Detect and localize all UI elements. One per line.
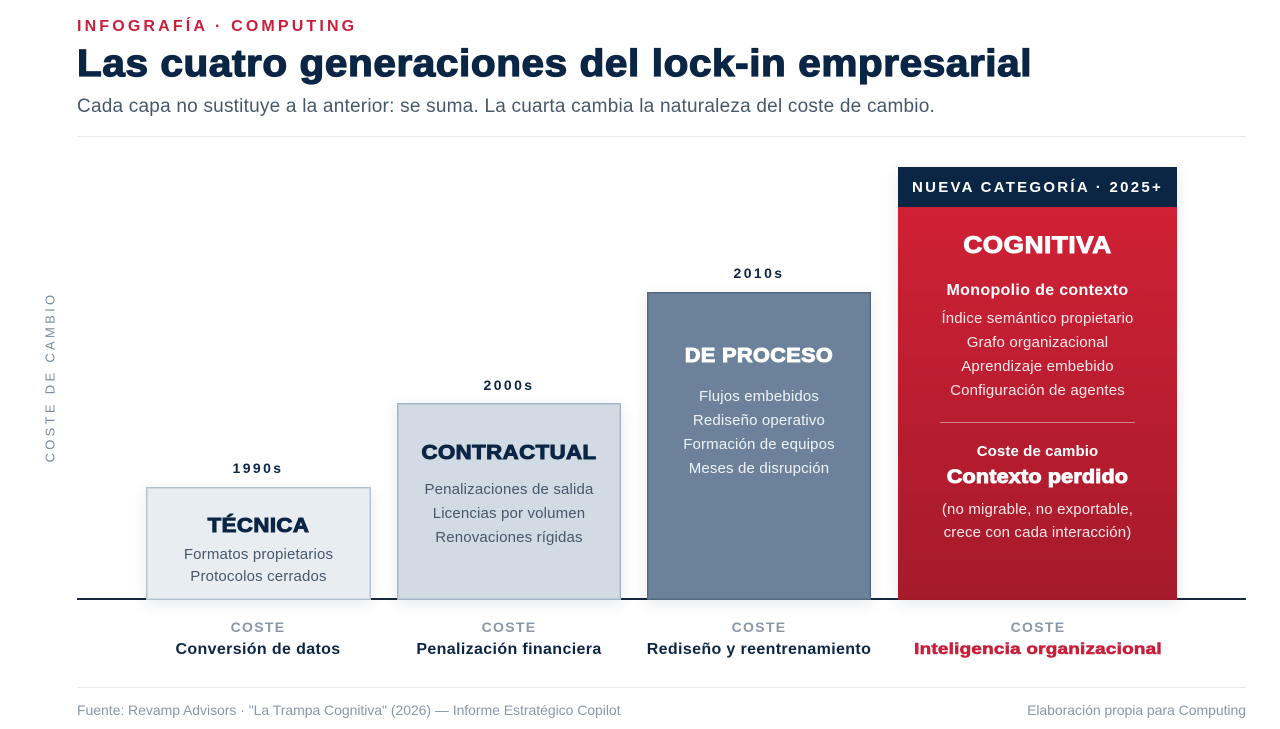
bar items: Renovaciones rígidas bbox=[435, 529, 583, 546]
bar title: TÉCNICA bbox=[208, 515, 309, 537]
bar title: DE PROCESO bbox=[685, 345, 833, 367]
bar items bbox=[425, 481, 594, 546]
bar title: CONTRACTUAL bbox=[421, 442, 597, 464]
badge: NUEVA CATEGORÍA · 2025+ bbox=[912, 179, 1163, 196]
cost: contractual bbox=[416, 619, 602, 658]
bar items: Formatos propietarios bbox=[184, 546, 333, 563]
cost value: Contexto perdido bbox=[947, 467, 1128, 488]
items: Aprendizaje embebido bbox=[961, 358, 1114, 375]
items: Índice semántico propietario bbox=[941, 310, 1134, 327]
cost: contractual: COSTE bbox=[482, 619, 536, 635]
items bbox=[941, 310, 1134, 399]
credit: Elaboración propia para Computing bbox=[1027, 702, 1246, 718]
bar: de proceso bbox=[647, 292, 871, 600]
bar title: COGNITIVA bbox=[963, 232, 1112, 259]
note: crece con cada interacción) bbox=[944, 524, 1131, 541]
bar items: Flujos embebidos bbox=[699, 388, 819, 405]
cost: contractual: Penalización financiera bbox=[416, 641, 602, 658]
header bbox=[77, 17, 1032, 117]
badge bbox=[898, 167, 1177, 207]
bar items bbox=[683, 388, 835, 477]
bar items: Rediseño operativo bbox=[693, 412, 825, 429]
bar items bbox=[184, 546, 333, 585]
note bbox=[942, 501, 1133, 541]
y axis label: COSTE DE CAMBIO bbox=[42, 292, 58, 462]
year: 1990s: 1990s bbox=[233, 460, 283, 476]
items: Configuración de agentes bbox=[950, 382, 1125, 399]
year: 2010s: 2010s bbox=[734, 265, 784, 281]
bar: técnica bbox=[146, 487, 371, 600]
cost: de proceso: COSTE bbox=[732, 619, 786, 635]
eyebrow: INFOGRAFÍA · COMPUTING bbox=[77, 18, 357, 35]
cost: técnica: COSTE bbox=[231, 619, 285, 635]
cost: técnica bbox=[175, 619, 341, 658]
cost: de proceso: Rediseño y reentrenamiento bbox=[647, 641, 871, 658]
bar items: Penalizaciones de salida bbox=[425, 481, 593, 498]
bar items: Protocolos cerrados bbox=[190, 568, 327, 585]
year: 2000s: 2000s bbox=[484, 377, 534, 393]
bar items: Meses de disrupción bbox=[689, 460, 829, 477]
baseline bbox=[77, 598, 1246, 600]
cost label: Coste de cambio bbox=[977, 443, 1098, 460]
bar: contractual bbox=[397, 403, 621, 600]
cost: técnica: Conversión de datos bbox=[175, 641, 341, 658]
bar items: Licencias por volumen bbox=[433, 505, 585, 522]
bar: cognitiva bbox=[898, 167, 1177, 600]
cost: cognitiva: Inteligencia organizacional bbox=[914, 641, 1162, 658]
bar items: Formación de equipos bbox=[683, 436, 835, 453]
items: Grafo organizacional bbox=[967, 334, 1108, 351]
title: Las cuatro generaciones del lock-in empresarial bbox=[77, 43, 1032, 85]
cost: cognitiva: COSTE bbox=[1011, 619, 1065, 635]
source: Fuente: Revamp Advisors · "La Trampa Cognitiva" (2026) — Informe Estratégico Copilot bbox=[77, 702, 620, 718]
note: (no migrable, no exportable, bbox=[942, 501, 1133, 518]
divider bbox=[940, 422, 1135, 423]
cost: cognitiva bbox=[914, 619, 1162, 658]
cost: de proceso bbox=[647, 619, 871, 658]
subtitle: Cada capa no sustituye a la anterior: se suma. La cuarta cambia la naturaleza del coste de cambio. bbox=[77, 96, 935, 117]
subheading: Monopolio de contexto bbox=[946, 282, 1129, 299]
